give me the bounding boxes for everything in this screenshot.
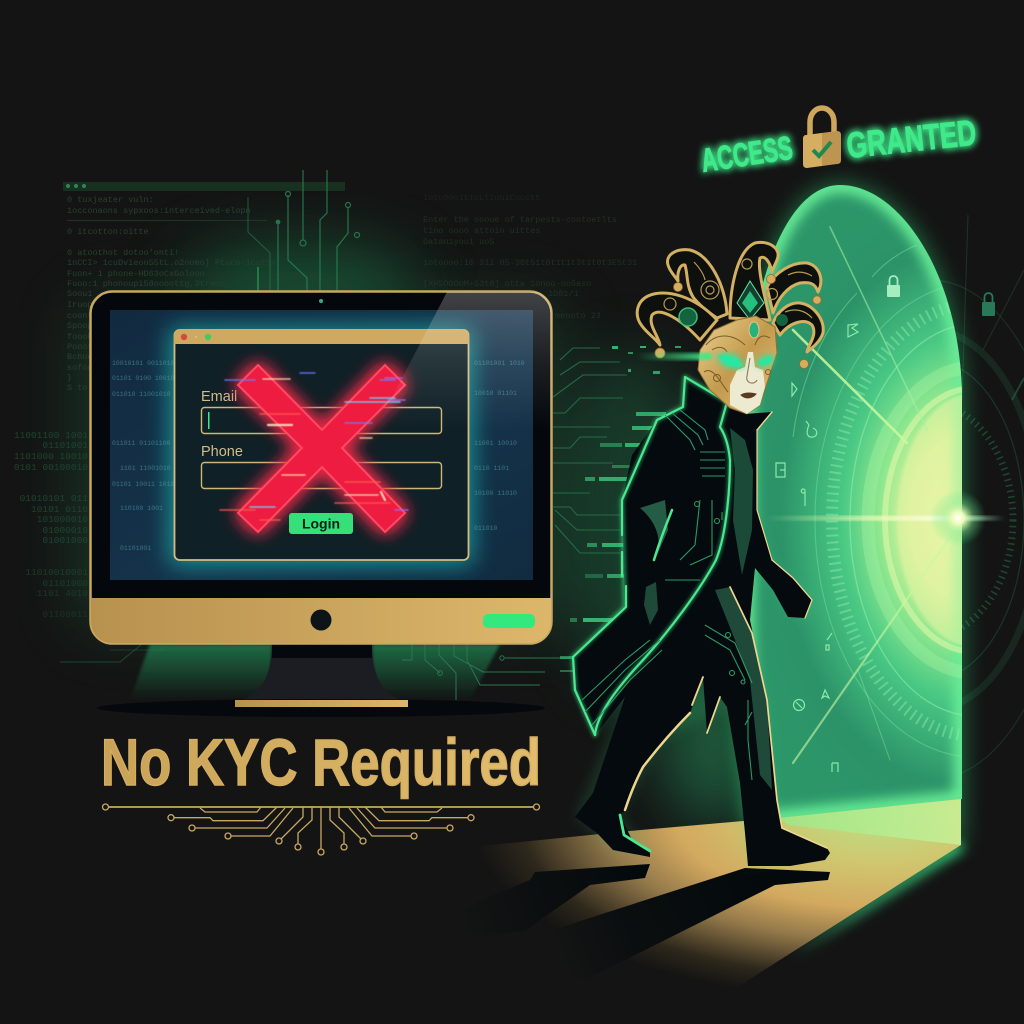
- door glow: [746, 185, 962, 845]
- jester figure: [573, 242, 830, 866]
- coat circuit details: [582, 410, 752, 780]
- code panel right: Dataniyoui uoS: [423, 237, 494, 247]
- screen data rows: [112, 360, 525, 552]
- mask nose and mouth: [741, 358, 757, 398]
- code panel left: 1occonaons sypxoos:interceived-elopn: [67, 206, 251, 216]
- mask white face: [730, 352, 765, 414]
- login button: [289, 513, 353, 534]
- door lock icon: [887, 276, 900, 297]
- hat green gems: [679, 281, 788, 326]
- background green glow: [75, 240, 770, 825]
- binary text left: [14, 430, 88, 620]
- home button: [310, 610, 332, 630]
- phone label: Phone: [201, 444, 243, 460]
- light on floor: [470, 799, 961, 998]
- code lines behind monitor edge: S to: [67, 383, 87, 393]
- hat ornaments: [664, 259, 812, 318]
- circuit traces above monitor: [248, 170, 360, 292]
- coat flap shading: [715, 587, 772, 790]
- jester hat lobes: [637, 242, 823, 352]
- door glyph icons: [776, 324, 858, 772]
- screen data rows: 011011 01101100: [112, 440, 171, 447]
- screen: [110, 310, 533, 580]
- binary text left: 0101 00100010: [14, 462, 88, 473]
- gold rim light: [625, 412, 827, 848]
- shadows: [425, 864, 830, 980]
- login button: Login: [302, 516, 340, 532]
- coat neon trim: [573, 377, 730, 851]
- screen data rows: 01101001: [120, 545, 151, 552]
- data bars dissolving from figure: [560, 346, 681, 672]
- screen data rows: 01101 10011 1010: [112, 481, 175, 488]
- screen data rows: 011010 11001010: [112, 391, 171, 398]
- horizontal light flare: [765, 490, 1005, 546]
- door rings: [792, 244, 962, 756]
- screen data rows: 10010101 00110100: [112, 360, 178, 367]
- code lines behind monitor edge: Spoop: [67, 321, 93, 331]
- binary text left: 11001100 1001: [14, 430, 88, 441]
- stand base: [235, 700, 408, 707]
- binary text left: 1101 4010: [37, 588, 88, 599]
- login window: [174, 330, 469, 560]
- code panel right: [423, 193, 637, 321]
- glass reflection: [393, 292, 552, 406]
- code panel right: Enter the oooue of tarpests-contoetlts: [423, 215, 617, 225]
- screen data rows: 1101 11001010: [120, 465, 171, 472]
- coat sleeve shading: [640, 500, 668, 560]
- code panel right: [XHSOOOoM+S3t0] otta 1onoo-oo5aso: [423, 279, 591, 289]
- title: No KYC Required: [101, 725, 541, 799]
- code lines behind monitor edge: [67, 300, 93, 393]
- code lines behind monitor edge: Ponot: [67, 342, 93, 352]
- binary text left: 11010010001: [25, 567, 88, 578]
- circuit traces between monitor and figure: [553, 348, 627, 553]
- gold circuit ornament: [102, 804, 540, 855]
- binary text left: 01010101 011: [20, 493, 88, 504]
- granted heading word: GRANTED: [845, 112, 978, 166]
- rings beyond door: [795, 215, 1024, 780]
- binary text left: 101000010: [37, 514, 88, 525]
- code panel right: 1otoooo:10 311 05-30t51t0t1t1t3t1t0t3E5t31: [423, 258, 637, 268]
- code lines behind monitor edge: Iruop: [67, 300, 93, 310]
- code panel left: 0 tuxjeater vuln:: [67, 195, 154, 205]
- phone field: [202, 462, 442, 488]
- circuit traces below monitor: [60, 644, 570, 700]
- code panel right: 1D01/1: [548, 289, 579, 299]
- stand shadow: [97, 699, 545, 717]
- mask ornament swirls: [704, 336, 770, 392]
- icon: padlock: [803, 108, 841, 168]
- code panel left: Fuon+ 1 phone-HD63oCxGoloon: [67, 269, 205, 279]
- code lines behind monitor edge: foook: [67, 332, 93, 342]
- binary text left: 01100011: [42, 609, 88, 620]
- monitor frame: [90, 292, 552, 644]
- monitor chin: [91, 598, 551, 643]
- screen data rows: 10100 11010: [474, 490, 517, 497]
- screen data rows: 10010 01101: [474, 390, 517, 397]
- code panel left: [63, 182, 345, 299]
- status light: [483, 614, 535, 628]
- code lines behind monitor edge: coont: [67, 311, 93, 321]
- screen data rows: 01101 0100 10010: [112, 375, 175, 382]
- mask green eyes: [718, 355, 773, 367]
- code panel left: 0 itcotton:oitte: [67, 227, 149, 237]
- code panel left: 0 atoothot dotoo'onti!: [67, 248, 179, 258]
- mask forehead gem: [749, 322, 759, 338]
- screen data rows: 011010: [474, 525, 498, 532]
- binary text left: 01000010: [42, 525, 88, 536]
- binary text left: 01101000: [42, 578, 88, 589]
- code lines behind monitor edge: }: [67, 373, 72, 383]
- binary text left: 10101 0110: [31, 504, 88, 515]
- email field: [202, 408, 442, 434]
- screen data rows: 01101001 1010: [474, 360, 525, 367]
- screen data rows: 0110 1101: [474, 465, 509, 472]
- figure glow: [573, 377, 830, 866]
- code panel left: 1nCCI> 1cuDvieooS5tL.o2oomo] Ptuco-1cothn: [67, 258, 276, 268]
- access heading word: ACCESS: [699, 129, 795, 179]
- screen data rows: 11001 10010: [474, 440, 517, 447]
- code panel right: tino oooo attoin uittes: [423, 226, 540, 236]
- binary text left: 01001000: [42, 535, 88, 546]
- code panel right: menoto 23: [555, 311, 601, 321]
- code panel right: 1utu0ooit1uLtiuu1Cucctt: [423, 193, 540, 203]
- binary text left: 1101000 10010: [14, 451, 88, 462]
- glitch streaks: [220, 373, 408, 520]
- code lines behind monitor edge: sofoo: [67, 363, 93, 373]
- door inner disc: [896, 392, 962, 648]
- coat and body silhouette: [573, 377, 830, 866]
- coat neon glow: [573, 377, 730, 735]
- door inner edge glow: [746, 185, 962, 830]
- monitor: [90, 292, 552, 717]
- hat bells: [655, 274, 821, 368]
- text cursor: [208, 412, 210, 429]
- faint lock icon beyond door: [982, 293, 995, 316]
- window buttons: [181, 334, 211, 340]
- email label: Email: [201, 389, 237, 405]
- window title bar: [174, 330, 469, 344]
- light rays: [793, 227, 955, 763]
- green eye streak: [637, 353, 712, 360]
- red X: [238, 365, 405, 532]
- inner shirt panel: [730, 428, 753, 575]
- screen data rows: 110100 1001: [120, 505, 163, 512]
- code lines behind monitor edge: Bchue: [67, 352, 93, 362]
- glowing doorway: [748, 185, 962, 818]
- code panel left: Soou1: [67, 289, 93, 299]
- code panel left: Fuoo:1 phonoupi58oooottg,3treoo: [67, 279, 225, 289]
- binary text left: 01101001: [42, 440, 88, 451]
- top camera: [319, 299, 323, 303]
- monitor stand: [235, 644, 408, 702]
- gold mask: [698, 316, 777, 414]
